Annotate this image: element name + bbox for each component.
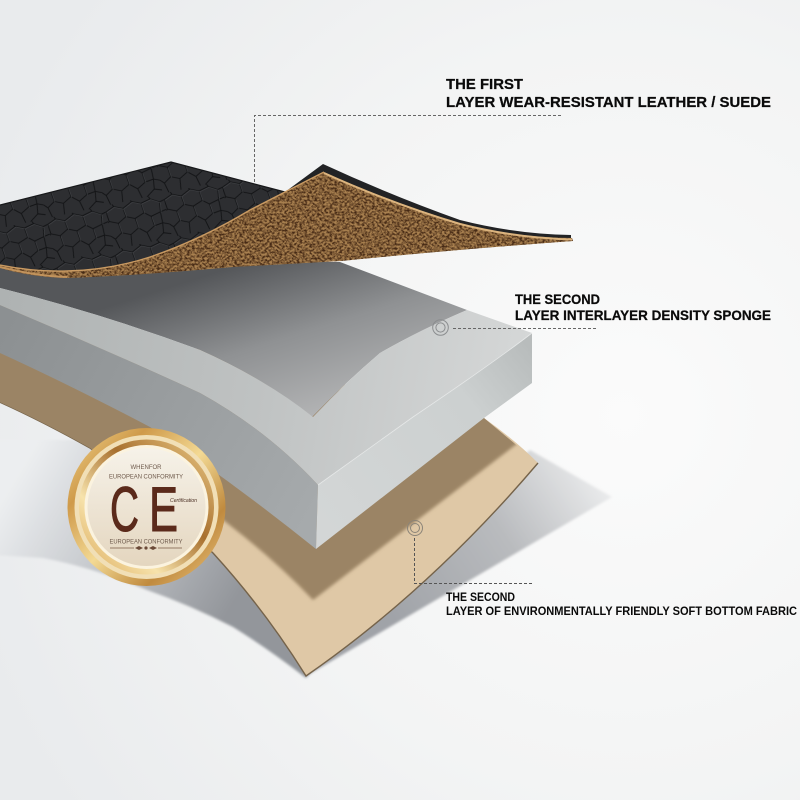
leather surface — [0, 160, 290, 275]
sponge right side — [316, 333, 532, 549]
heading: bottom layer — [446, 592, 797, 618]
badge ornament — [110, 546, 182, 550]
layer 1: leather and suede sheet — [0, 160, 580, 285]
shadow: bottom layer on ground — [0, 440, 612, 678]
badge CE mark: C — [110, 475, 139, 545]
sponge top recess — [0, 262, 467, 417]
black lifted edge — [285, 164, 571, 240]
heading: second layer — [515, 291, 771, 323]
badge top text: EUROPEAN CONFORMITY — [109, 474, 183, 480]
layer 2: grey density sponge — [0, 262, 532, 549]
cork suede underside — [0, 172, 573, 278]
badge top text — [109, 464, 183, 480]
callout: second layer marker and leader — [433, 320, 596, 335]
badge script text: Certification — [170, 498, 197, 504]
layer 3: tan bottom fabric — [0, 300, 538, 676]
heading: first layer: LAYER WEAR-RESISTANT LEATHER / SUEDE — [446, 94, 771, 111]
badge top text: WHENFOR — [130, 464, 162, 471]
badge: CE certification medal — [68, 428, 226, 586]
sponge top band — [0, 288, 532, 485]
heading: first layer: THE FIRST — [446, 76, 523, 93]
heading: second layer: THE SECOND — [515, 291, 600, 307]
callout: first layer leader — [254, 116, 562, 182]
sponge left side — [0, 305, 318, 549]
heading: bottom layer: THE SECOND — [446, 592, 515, 604]
heading: second layer: LAYER INTERLAYER DENSITY SPONGE — [515, 307, 771, 323]
heading: first layer — [446, 76, 771, 111]
badge CE mark: E — [149, 475, 178, 545]
badge CE mark — [110, 475, 178, 545]
badge bottom text: EUROPEAN CONFORMITY — [110, 538, 182, 546]
callout: bottom layer marker and leader — [408, 520, 534, 584]
